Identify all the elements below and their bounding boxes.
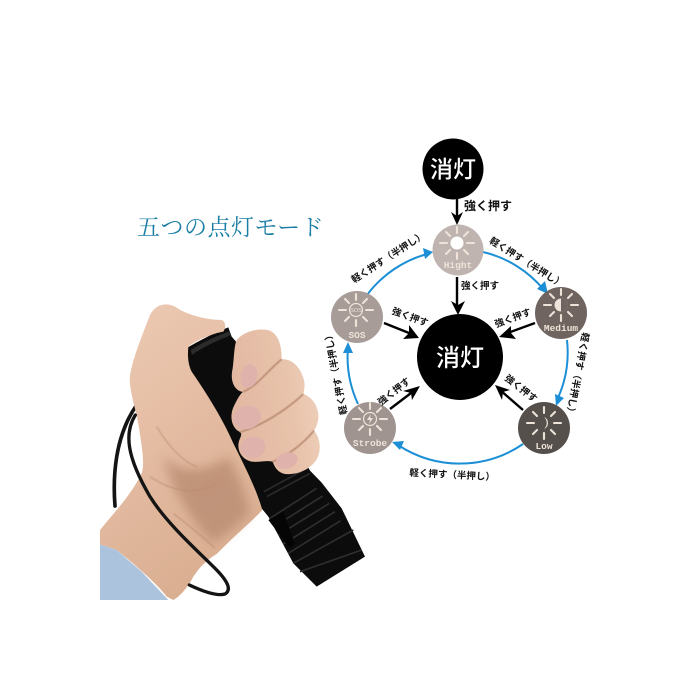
photo: hand holding flashlight	[100, 304, 365, 602]
label: strong press center: 強く押す	[461, 280, 499, 292]
fingernails	[234, 364, 298, 469]
off state circle (center)	[417, 314, 503, 400]
mode: Strobe	[344, 402, 396, 454]
label: half press bottom: 軽く押す（半押し）	[409, 467, 495, 483]
mode: SOS	[331, 291, 383, 343]
shirt cuff	[100, 544, 168, 602]
mode: Low: Low	[535, 441, 553, 452]
label: strong press Strobe: 強く押す	[375, 375, 413, 408]
label: strong press Medium: 強く押す	[493, 306, 533, 330]
label: half press left: 軽く押す（半押し）	[322, 329, 350, 416]
wrist strap: front strand	[129, 415, 228, 595]
mode cycle arcs	[348, 252, 568, 464]
fingers	[231, 329, 320, 474]
mode: SOS: SOS	[350, 308, 362, 314]
blue arrowheads	[343, 248, 564, 450]
mode: Medium: Medium	[544, 323, 578, 334]
mode: Hight: Hight	[444, 260, 472, 271]
palm creases	[150, 427, 217, 548]
mode: Strobe: Strobe	[353, 438, 387, 449]
mode: Medium	[535, 287, 587, 339]
mode: Hight	[432, 224, 484, 276]
press arrows	[384, 198, 535, 410]
label: strong press Low: 強く押す	[502, 372, 540, 405]
label: strong press top: 強く押す	[464, 198, 512, 213]
label: half press right: 軽く押す（半押し）	[563, 331, 591, 418]
off state circle (top)	[422, 138, 484, 200]
flashlight	[183, 327, 365, 587]
off state circle (top): 消灯	[430, 156, 476, 182]
finger creases	[240, 359, 314, 462]
mode: Low	[518, 402, 570, 454]
mode: SOS: SOS	[348, 330, 366, 341]
off state circle (center): 消灯	[436, 345, 484, 372]
label: half press upper right: 軽く押す（半押し）	[487, 235, 566, 290]
palm	[100, 304, 262, 600]
title: 五つの点灯モード	[137, 215, 324, 240]
palm shadow	[163, 457, 250, 543]
label: strong press SOS: 強く押す	[390, 305, 430, 329]
label: half press upper left: 軽く押す（半押し）	[349, 229, 427, 286]
wrist strap: back strand	[114, 406, 136, 506]
